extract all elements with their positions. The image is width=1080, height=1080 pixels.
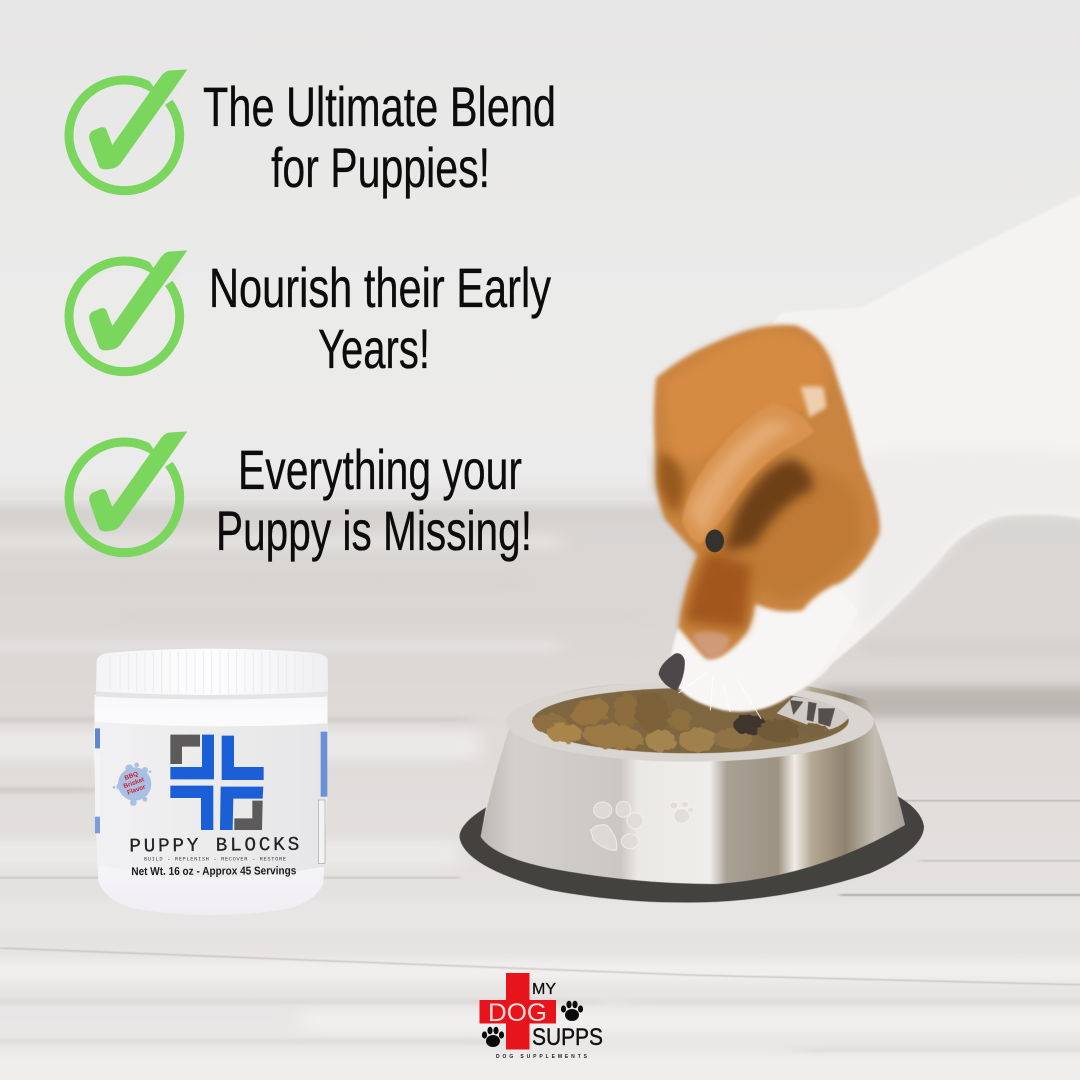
dog muzzle [671,576,858,712]
kibble pile [533,688,829,752]
flavor splash: BBQ [124,771,139,782]
red cross [480,973,556,1050]
dog ear [682,404,815,543]
dog [654,187,1080,719]
snout pink patch [692,632,730,659]
bowl body [481,678,905,884]
jar body [94,695,328,915]
bowl interior [533,688,849,753]
heading line group 2 [209,256,551,380]
background: wall [0,0,1080,510]
heading line group 2: Nourish their Early [209,256,551,319]
heading line group 1: for Puppies! [271,136,490,199]
product jar [94,649,328,915]
SUPPS wordmark: SUPPS [532,1024,603,1051]
jar label [95,722,327,877]
orange head [654,325,880,659]
icon: green check 2 [69,250,187,372]
heading line group 3: Puppy is Missing! [216,499,532,562]
embossed paw prints [591,801,694,850]
flavor splash: Brisket [123,776,146,790]
heading line group 3: Everything your [238,438,522,501]
tagline: DOG SUPPLEMENTS [496,1054,588,1060]
side panels [95,728,327,863]
heading line group 3 [216,438,532,562]
jar lid [96,649,328,695]
net weight: Net Wt. 16 oz - Approx 45 Servings [131,865,296,878]
MY wordmark: MY [532,981,556,998]
icon: green check 3 [69,431,187,553]
whiskers [679,672,761,719]
icon: green check 1 [69,69,187,191]
dog body [758,187,1080,697]
flavor splash: Flavor [126,783,147,797]
heading line group 1 [203,75,556,199]
product name: PUPPY BLOCKS [129,834,299,858]
paw left [482,1027,504,1047]
logo blocks [170,735,264,830]
paw right [561,1001,583,1021]
bowl rubber ring [459,796,924,903]
heading line group 2: Years! [318,317,430,380]
dog eye [705,530,724,552]
brand logo [480,973,603,1060]
flavor splash [113,763,151,806]
background: wooden floor [0,484,1080,1080]
dog nose [659,653,685,691]
bowl rim [506,682,874,762]
DOG wordmark: DOG [488,999,547,1027]
food bowl [459,678,924,903]
tagline: BUILD - REPLENISH - RECOVER - RESTORE [144,856,286,862]
heading line group 1: The Ultimate Blend [203,75,556,138]
